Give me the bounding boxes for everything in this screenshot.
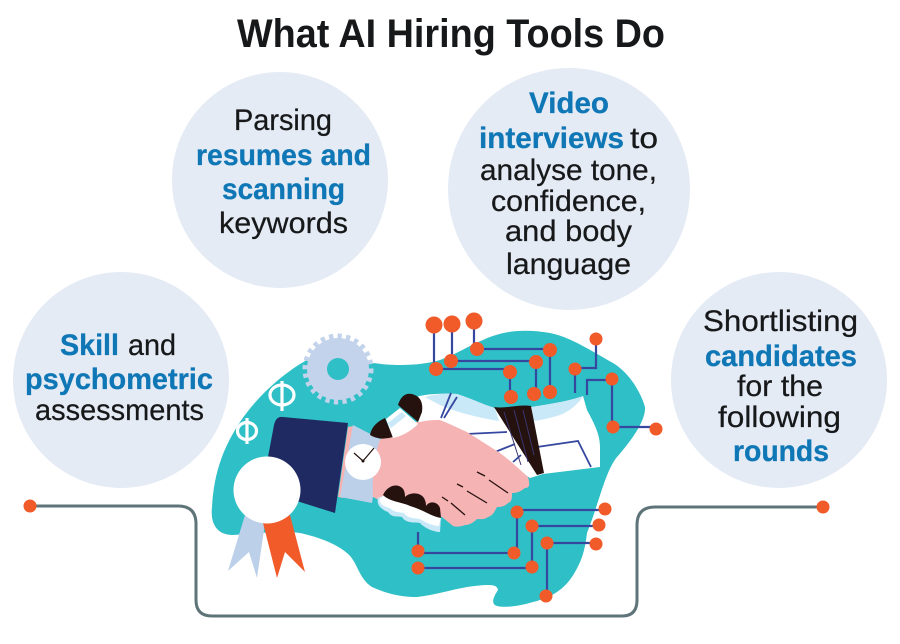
circuit: top left (426, 312, 557, 404)
right sleeve (407, 393, 600, 478)
panel: parsing resumes: scanning (222, 173, 345, 206)
panel: parsing resumes: keywords (219, 207, 348, 240)
panel: video interviews: and body (505, 215, 632, 248)
panel: skill assessments: psychometric (25, 363, 213, 396)
panel: skill assessments: Skill (60, 329, 119, 362)
teal blob background (212, 331, 645, 607)
panel: skill assessments (13, 272, 229, 488)
panel: parsing resumes (172, 72, 388, 288)
panel: shortlisting candidates (671, 272, 887, 488)
panel: shortlisting candidates: rounds (733, 435, 829, 468)
panel: shortlisting candidates: following (718, 401, 841, 434)
panel: shortlisting candidates: Shortlisting (703, 305, 858, 338)
panel: shortlisting candidates: for the (737, 370, 823, 403)
panel: video interviews: confidence, (491, 185, 646, 218)
panel: parsing resumes: resumes and (196, 139, 371, 172)
handshake (340, 394, 529, 532)
panel: video interviews: Video (529, 87, 609, 120)
panel: video interviews: to (630, 122, 658, 155)
panel: video interviews: language (506, 248, 631, 281)
circuit: bottom (412, 502, 612, 602)
panel: skill assessments: and (128, 329, 176, 362)
icon: coin symbols (238, 381, 294, 444)
panel: video interviews: interviews (479, 122, 624, 155)
icon: medal with ribbons (228, 456, 305, 578)
panel: shortlisting candidates: candidates (705, 340, 857, 373)
panel: video interviews (448, 68, 690, 310)
left sleeve (268, 417, 353, 513)
panel: video interviews: analyse tone, (480, 154, 657, 187)
circuit: top right (568, 332, 662, 436)
connector line (24, 500, 830, 616)
icon: wristwatch (345, 444, 381, 480)
title: What AI Hiring Tools Do (237, 12, 665, 56)
panel: parsing resumes: Parsing (234, 104, 332, 137)
panel: skill assessments: assessments (35, 394, 204, 427)
icon: gear (305, 336, 371, 402)
